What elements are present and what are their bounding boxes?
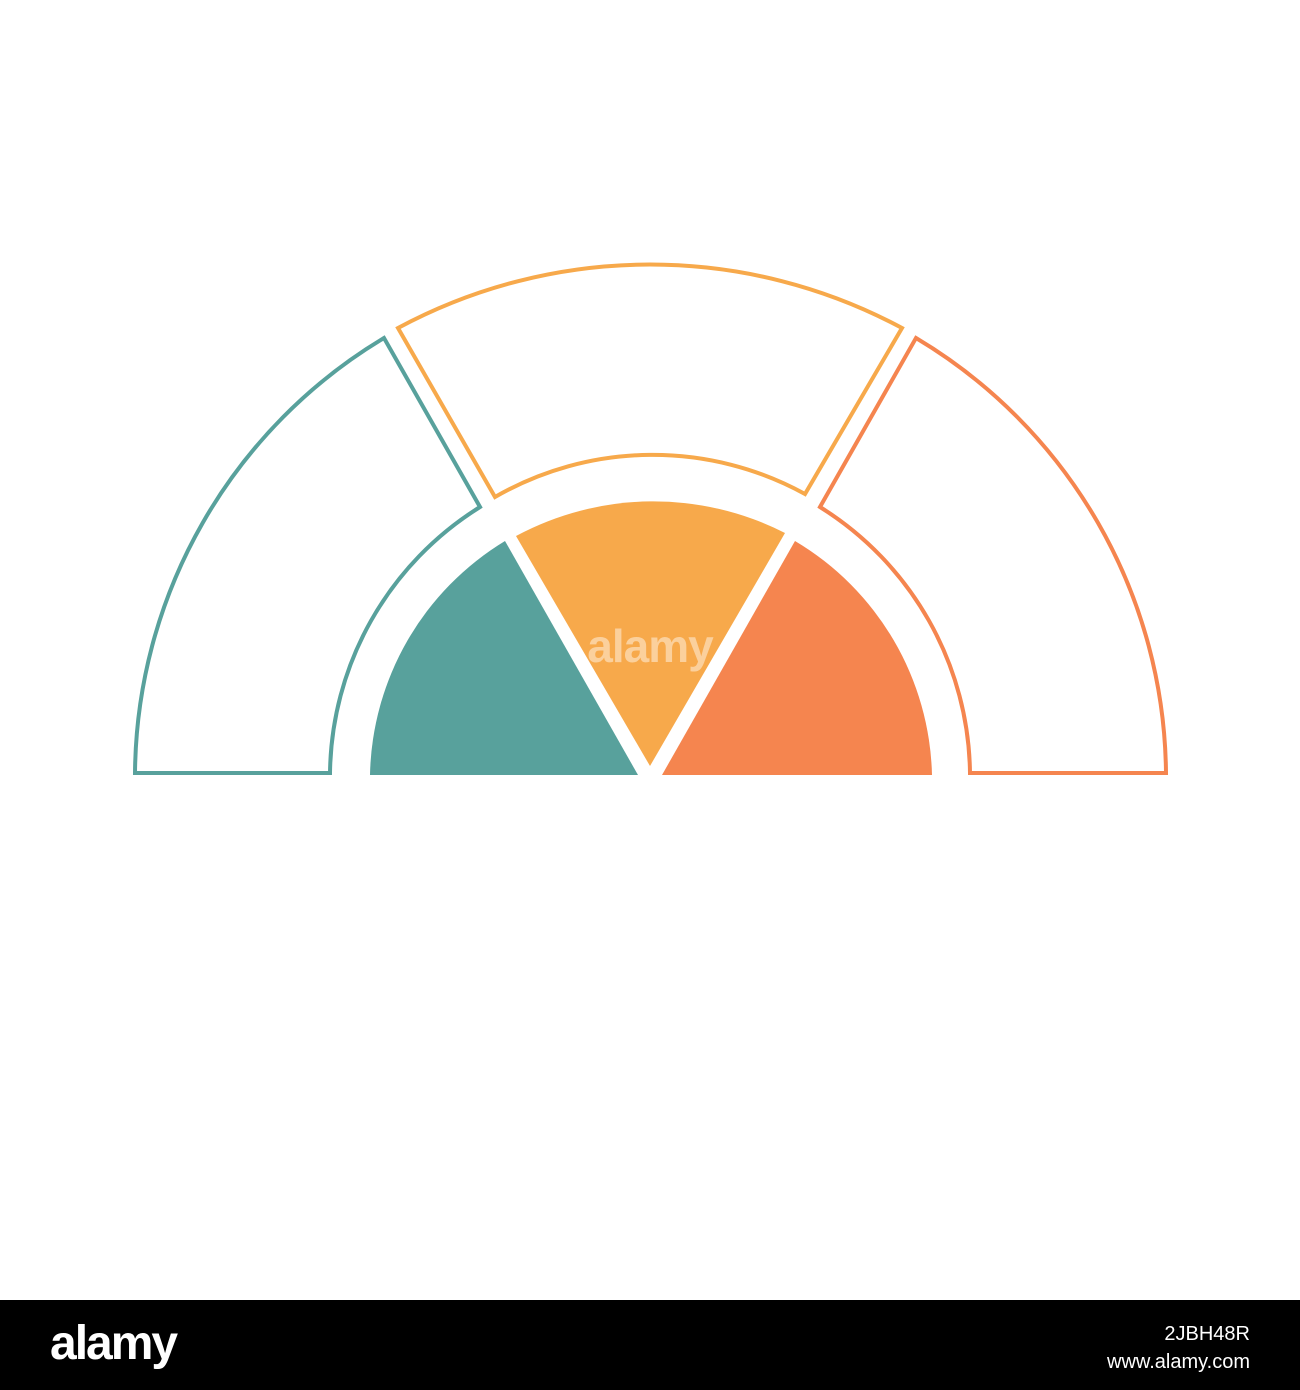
wedge: teal [370, 541, 638, 775]
footer id: 2JBH48R [1164, 1323, 1250, 1345]
wedge: orange [516, 501, 785, 766]
footer id [1107, 1323, 1250, 1373]
footer logo: alamy [50, 1317, 176, 1370]
watermark: alamy [587, 620, 714, 672]
footer id: www.alamy.com [1107, 1351, 1250, 1373]
wedge: coral [662, 541, 932, 775]
footer bar [0, 1300, 1300, 1390]
segment: outer coral [820, 338, 1166, 773]
segment: outer orange [398, 265, 902, 497]
segment: outer teal [135, 338, 480, 773]
